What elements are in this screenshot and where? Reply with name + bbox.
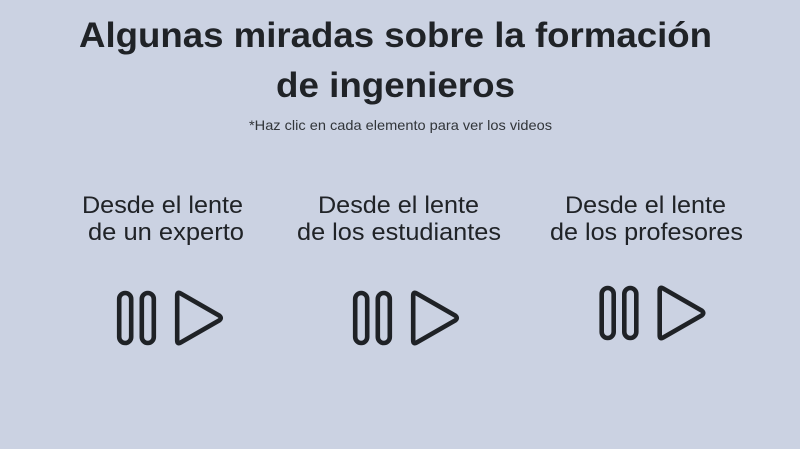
title: de ingenieros [276,66,515,105]
column: profesores [550,192,743,338]
title [79,16,712,105]
column: estudiantes [297,192,501,343]
column: experto [82,192,244,343]
heading: estudiantes: Desde el lente [318,192,479,219]
heading: estudiantes [297,192,501,246]
heading: experto: Desde el lente [82,192,243,219]
heading: estudiantes: de los estudiantes [297,219,501,246]
icon: pause and play estudiantes [355,293,457,343]
heading: experto: de un experto [88,219,244,246]
heading: profesores: de los profesores [550,219,743,246]
icon: pause and play experto [119,293,221,343]
heading: profesores [550,192,743,246]
instruction note: *Haz clic en cada elemento para ver los videos [249,117,552,133]
icon: pause and play profesores [602,288,703,338]
title: Algunas miradas sobre la formación [79,16,712,55]
heading: experto [82,192,244,246]
heading: profesores: Desde el lente [565,192,726,219]
